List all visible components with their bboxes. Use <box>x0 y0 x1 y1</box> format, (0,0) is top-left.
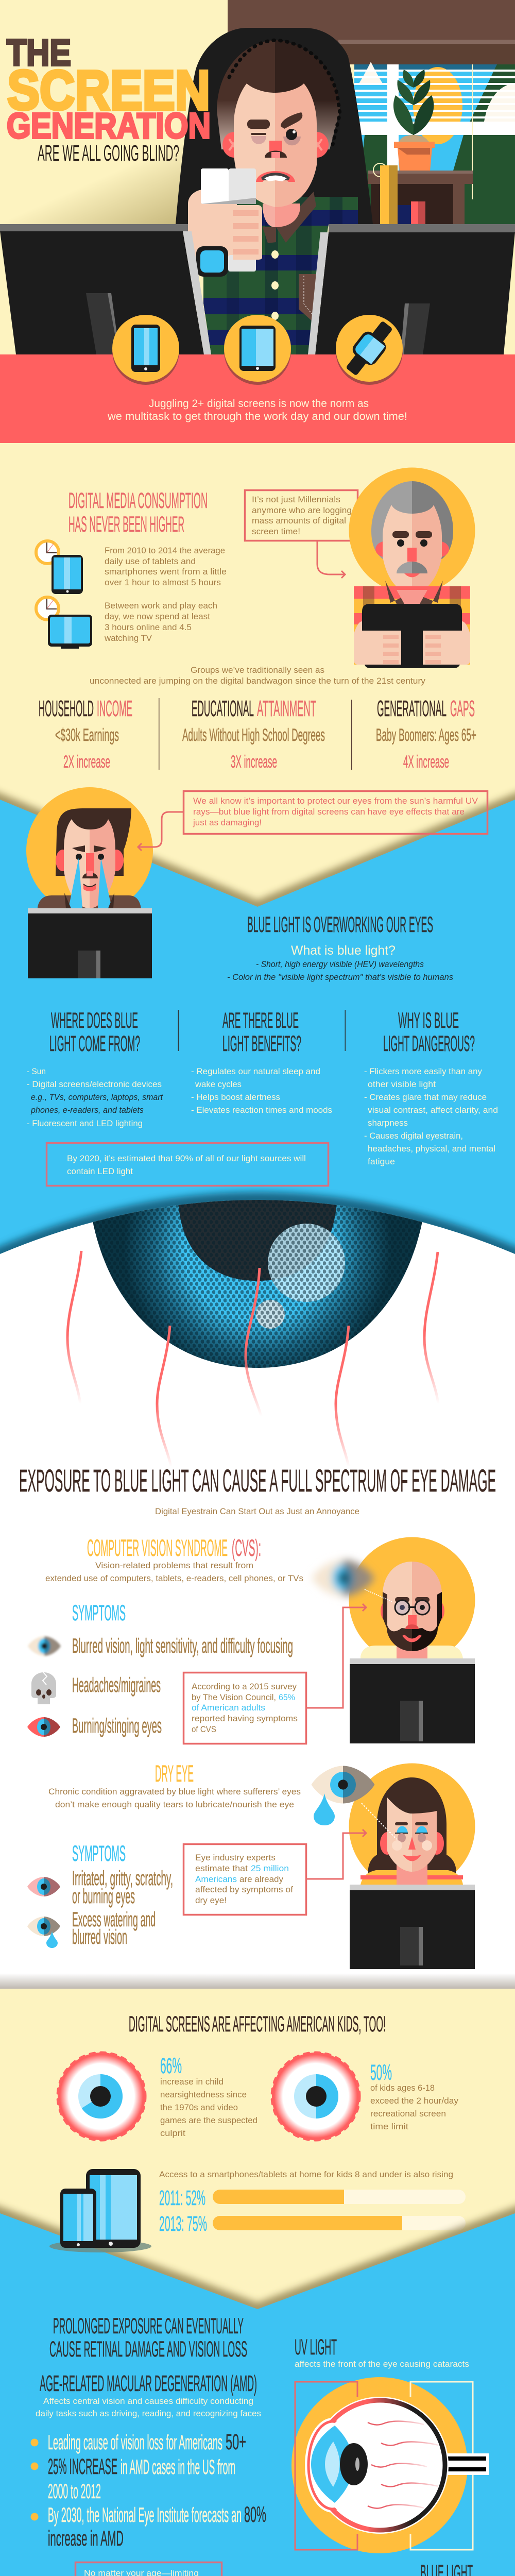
text: what is blue light: What is blue light? <box>291 943 396 958</box>
heading: digital media consumption <box>68 488 208 537</box>
text: access rising: Access to a smartphones/tablets at home for kids 8 and under is also rising <box>159 2170 453 2179</box>
text: INCOME <box>97 696 132 721</box>
stat column: educational attainment: EDUCATIONAL <box>192 696 254 721</box>
section shadow <box>0 1973 515 1989</box>
text: amd definition <box>36 2397 261 2418</box>
callout: uv rays warning: We all know it’s important to protect our eyes from the sun’s harmful UV <box>193 796 478 806</box>
column: where does blue light come from: e.g., TVs, computers, laptops, smart <box>31 1093 163 1102</box>
icon: blurred eye callout <box>312 1560 374 1597</box>
character: face <box>234 83 317 207</box>
text: what is blue light: - Color in the "visible light spectrum" that’s visible to humans <box>227 973 453 982</box>
icon: watering eye <box>27 1917 60 1948</box>
list: amd facts: 25% INCREASE <box>48 2454 117 2479</box>
icon: tablet badge <box>224 315 291 385</box>
text: digital eyestrain subtitle: Digital Eyestrain Can Start Out as Just an Annoyance <box>155 1507 359 1516</box>
column: why is blue light dangerous: fatigue <box>368 1157 395 1166</box>
text: DIGITAL MEDIA CONSUMPTION <box>68 488 208 513</box>
column: why is blue light dangerous: visual contrast, affect clarity, and <box>368 1106 498 1115</box>
stat column: household income: <$30k Earnings <box>55 725 119 745</box>
callout: 25 million americans: dry eye! <box>195 1896 227 1905</box>
panel: blue light section <box>0 795 515 1257</box>
text: SYMPTOMS <box>72 1601 126 1625</box>
text: 50 percent stat: of kids ages 6-18 <box>370 2083 435 2093</box>
iris with halftone <box>93 1200 422 1368</box>
callout: millennials: It’s not just Millennials <box>252 495 340 504</box>
text: (CVS): <box>232 1535 261 1561</box>
text: Burning/stinging eyes <box>72 1715 162 1737</box>
column: where does blue light come from: - Fluorescent and LED lighting <box>27 1119 143 1128</box>
text: uv light note: affects the front of the eye causing cataracts <box>295 2360 469 2369</box>
callout: 25 million americans: Americans <box>195 1875 237 1884</box>
column: where does blue light come from: LIGHT COME FROM? <box>49 1031 140 1056</box>
icon: phone badge <box>112 315 179 385</box>
callout: led light by 2020 <box>46 1143 329 1186</box>
bracket: blue light <box>410 2382 473 2550</box>
text: tablet and smartphone use: From 2010 to 2014 the average <box>105 546 225 555</box>
bar chart: access to devices: 2011: 52% <box>159 2186 205 2210</box>
text: Excess watering and <box>72 1908 156 1931</box>
stat column: household income: 2X increase <box>63 752 110 772</box>
text: DRY EYE <box>155 1760 194 1787</box>
text: amd definition: daily tasks such as driving, reading, and recognizing faces <box>36 2409 261 2418</box>
icon: dry eye with tear <box>312 1766 397 1839</box>
text: juggling screens <box>107 398 407 422</box>
callout: 65 percent of adults: 65% <box>279 1693 295 1702</box>
text: HAS NEVER BEEN HIGHER <box>68 512 184 537</box>
callout: 65 percent of adults: by The Vision Council, <box>192 1693 276 1702</box>
character: phone in hand <box>188 168 262 277</box>
text: cvs definition: extended use of computers, tablets, e-readers, cell phones, or TVs <box>45 1574 303 1583</box>
icon: blurred vision eye <box>28 1636 61 1656</box>
column: are there blue light benefits: wake cycles <box>195 1080 242 1089</box>
text: excess watering <box>72 1908 156 1948</box>
icon: clock and tv <box>36 597 92 649</box>
text: 50 percent stat <box>370 2060 459 2131</box>
text: 66 percent stat: nearsightedness since <box>160 2090 247 2099</box>
monitor <box>350 1885 475 1969</box>
list: amd facts: By 2030, the National Eye Institute forecasts an <box>48 2504 242 2527</box>
callout: uv rays warning: just as damaging! <box>193 818 262 827</box>
stat column: generational gaps <box>376 696 476 772</box>
stat column: household income <box>39 696 132 772</box>
character: grandpa with tablet <box>349 468 475 668</box>
column: why is blue light dangerous: - Causes digital eyestrain, <box>364 1131 463 1141</box>
list: amd facts: Leading cause of vision loss for Americans <box>48 2431 222 2454</box>
illustration: giant eye <box>0 1187 515 1463</box>
text: dry eye definition: Chronic condition aggravated by blue light where sufferers’ eyes <box>48 1787 301 1797</box>
icon: clock and phone <box>36 541 83 594</box>
icon: phone and tablet <box>49 2169 151 2252</box>
arrow: cvs callout <box>306 1604 366 1708</box>
callout: 65 percent of adults: According to a 2015 survey <box>192 1682 297 1691</box>
text: excess watering: blurred vision <box>72 1926 127 1948</box>
callout: 65 percent of adults: of American adults <box>192 1703 265 1713</box>
character: chair <box>176 28 373 224</box>
stat column: household income: HOUSEHOLD <box>39 696 94 721</box>
arrow: dry eye callout <box>306 1829 366 1879</box>
callout: limiting exposure <box>75 2563 221 2576</box>
character: bearded man with glasses <box>349 1537 475 1663</box>
callout: led light by 2020: contain LED light <box>67 1167 133 1176</box>
text: online and tv hours: Between work and play each <box>105 601 217 611</box>
text: amd definition: Affects central vision and causes difficulty conducting <box>43 2397 253 2406</box>
character: neck and collar <box>263 192 316 243</box>
callout: 65 percent of adults <box>183 1672 306 1743</box>
character: person with blue light eyes <box>26 787 153 978</box>
text: tablet and smartphone use <box>105 546 227 587</box>
text: 66 percent stat: 66% <box>160 2054 182 2078</box>
text: 80% <box>244 2502 266 2527</box>
text: online and tv hours: watching TV <box>104 634 152 643</box>
column: why is blue light dangerous: - Flickers more easily than any <box>364 1067 483 1076</box>
text: 50 percent stat: recreational screen <box>370 2109 446 2119</box>
text: groups intro <box>90 666 426 686</box>
column: are there blue light benefits: - Regulates our natural sleep and <box>191 1067 320 1076</box>
title: SCREEN <box>7 59 210 121</box>
column: where does blue light come from: - Sun <box>27 1067 46 1076</box>
column: where does blue light come from <box>27 1008 163 1128</box>
text: 66 percent stat: the 1970s and video <box>160 2103 238 2112</box>
text: 50 percent stat: exceed the 2 hour/day <box>370 2096 459 2106</box>
text: COMPUTER VISION SYNDROME <box>87 1535 228 1561</box>
arrow: callout to grandpa <box>317 541 345 578</box>
heading: computer vision syndrome <box>87 1535 261 1561</box>
text: CAUSE RETINAL DAMAGE AND VISION LOSS <box>49 2337 247 2362</box>
bar chart: access to devices: 2013: 75% <box>159 2212 207 2235</box>
column: why is blue light dangerous: - Creates glare that may reduce <box>364 1093 487 1102</box>
title: ARE WE ALL GOING BLIND? <box>38 141 179 166</box>
character: hair <box>217 40 340 149</box>
callout: 65 percent of adults: reported having symptoms <box>192 1714 298 1723</box>
text: cvs definition: Vision-related problems that result from <box>95 1561 253 1570</box>
text: tablet and smartphone use: daily use of tablets and <box>105 557 196 566</box>
text: 66 percent stat <box>160 2054 258 2138</box>
column: where does blue light come from: - Digital screens/electronic devices <box>27 1080 162 1089</box>
shelf and books <box>368 163 473 224</box>
callout: 25 million americans: 25 million <box>251 1864 289 1873</box>
text: cvs definition <box>45 1561 303 1583</box>
column: why is blue light dangerous <box>364 1008 498 1166</box>
callout: millennials: anymore who are logging <box>252 506 352 515</box>
text: tablet and smartphone use: over 1 hour to almost 5 hours <box>105 578 221 587</box>
text: 50 percent stat: time limit <box>370 2122 408 2131</box>
column: why is blue light dangerous: sharpness <box>368 1118 408 1128</box>
panel: kids section background <box>0 1989 515 2318</box>
character: woman with dry eye <box>349 1763 475 1890</box>
character: buttons and pocket <box>271 250 320 322</box>
stat column: generational gaps: 4X increase <box>403 752 449 772</box>
list: amd facts: increase in AMD <box>48 2526 124 2550</box>
panel: retinal damage section <box>0 2209 515 2576</box>
text: tablet and smartphone use: smartphones went from a little <box>105 567 227 577</box>
text: 66 percent stat: increase in child <box>160 2077 224 2087</box>
list: amd facts: 50+ <box>226 2430 246 2454</box>
text: dry eye definition: don’t make enough quality tears to lubricate/nourish the eye <box>55 1800 294 1809</box>
panel: device band <box>0 315 515 443</box>
column: are there blue light benefits: - Elevates reaction times and moods <box>191 1106 332 1115</box>
callout: 25 million americans <box>183 1844 306 1914</box>
list: amd facts: in AMD cases in the US from <box>121 2456 235 2479</box>
callout: uv rays warning: rays—but blue light from digital screens can have eye effects that are <box>193 807 465 817</box>
text: groups intro: Groups we’ve traditionally seen as <box>191 666 324 675</box>
diagram: eye cross-section <box>291 2377 489 2553</box>
callout: 65 percent of adults: of CVS <box>192 1725 216 1734</box>
callout: uv rays warning <box>183 791 487 834</box>
left laptop <box>0 224 211 354</box>
character: ears <box>222 132 329 158</box>
text: irritated eyes <box>72 1867 173 1908</box>
text: online and tv hours: day, we now spend at least <box>105 612 210 621</box>
text: Headaches/migraines <box>72 1674 161 1697</box>
stat column: educational attainment: Adults Without High School Degrees <box>182 725 325 745</box>
title: THE <box>7 32 71 74</box>
column: are there blue light benefits: ARE THERE BLUE <box>222 1008 299 1033</box>
text: juggling screens: we multitask to get through the work day and our down time! <box>107 411 407 422</box>
column: why is blue light dangerous: other visible light <box>368 1080 436 1089</box>
icon: irritated eye <box>27 1877 60 1896</box>
text: UV LIGHT <box>295 2335 337 2360</box>
text: SYMPTOMS <box>72 1841 126 1866</box>
heading: prolonged exposure <box>49 2314 247 2362</box>
column: are there blue light benefits: LIGHT BENEFITS? <box>222 1031 301 1056</box>
text: dry eye definition <box>48 1787 301 1809</box>
list: amd facts: 2000 to 2012 <box>48 2480 101 2503</box>
column: are there blue light benefits: - Helps boost alertness <box>191 1093 280 1102</box>
title <box>7 32 211 166</box>
text: juggling screens: Juggling 2+ digital screens is now the norm as <box>149 398 369 410</box>
stat column: educational attainment: 3X increase <box>231 752 277 772</box>
bar chart: access to devices <box>159 2186 466 2235</box>
text: groups intro: unconnected are jumping on the digital bandwagon since the turn of the 21st century <box>90 676 426 686</box>
column: are there blue light benefits <box>191 1008 332 1115</box>
text: 50 percent stat: 50% <box>370 2060 392 2085</box>
chart: 50 percent eye <box>272 2053 359 2140</box>
callout: led light by 2020: By 2020, it’s estimated that 90% of all of our light sources will <box>67 1154 306 1163</box>
dotted leader <box>365 1589 392 1602</box>
text: what is blue light <box>227 943 453 982</box>
right laptop <box>308 224 515 354</box>
column: where does blue light come from: phones, e-readers, and tablets <box>30 1106 144 1115</box>
monitor <box>350 1658 475 1743</box>
column: where does blue light come from: WHERE DOES BLUE <box>51 1008 138 1033</box>
bracket: uv light <box>295 2382 357 2550</box>
icon: skull <box>31 1672 56 1704</box>
callout: 25 million americans: estimate that <box>195 1864 248 1873</box>
callout: millennials <box>245 490 357 541</box>
text: Irritated, gritty, scratchy, <box>72 1867 173 1890</box>
text: online and tv hours <box>104 601 217 643</box>
callout: millennials: screen time! <box>252 527 300 536</box>
title: GENERATION <box>7 106 211 146</box>
text: 66 percent stat: culprit <box>160 2129 185 2138</box>
arrow: callout to person <box>138 812 183 851</box>
panel: cream media consumption background <box>0 443 515 907</box>
text: what is blue light: - Short, high energy visible (HEV) wavelengths <box>256 960 424 969</box>
window with blinds <box>354 62 515 224</box>
text: GAPS <box>450 696 475 721</box>
icon: smartwatch badge <box>336 315 403 385</box>
callout: 25 million americans: Eye industry experts <box>195 1853 276 1862</box>
callout: millennials: mass amounts of digital <box>252 516 346 526</box>
panel: hero illustration <box>0 0 515 361</box>
text: irritated eyes: or burning eyes <box>72 1885 135 1908</box>
veins <box>67 1251 438 1467</box>
list: amd facts <box>31 2430 266 2550</box>
character: shirt <box>203 197 358 354</box>
icon: potted plant <box>393 70 435 171</box>
text: ATTAINMENT <box>257 696 316 721</box>
stat column: educational attainment <box>182 696 325 772</box>
column: why is blue light dangerous: headaches, physical, and mental <box>368 1144 495 1154</box>
icon: burning eye <box>27 1717 60 1737</box>
text: 66 percent stat: games are the suspected <box>160 2116 258 2125</box>
chart: 66 percent eye <box>58 2053 145 2140</box>
callout: 25 million americans: are already <box>239 1875 284 1884</box>
callout: 25 million americans: affected by symptoms of <box>195 1885 293 1894</box>
text: online and tv hours: 3 hours online and 4.5 <box>105 623 192 632</box>
text: PROLONGED EXPOSURE CAN EVENTUALLY <box>53 2314 244 2338</box>
